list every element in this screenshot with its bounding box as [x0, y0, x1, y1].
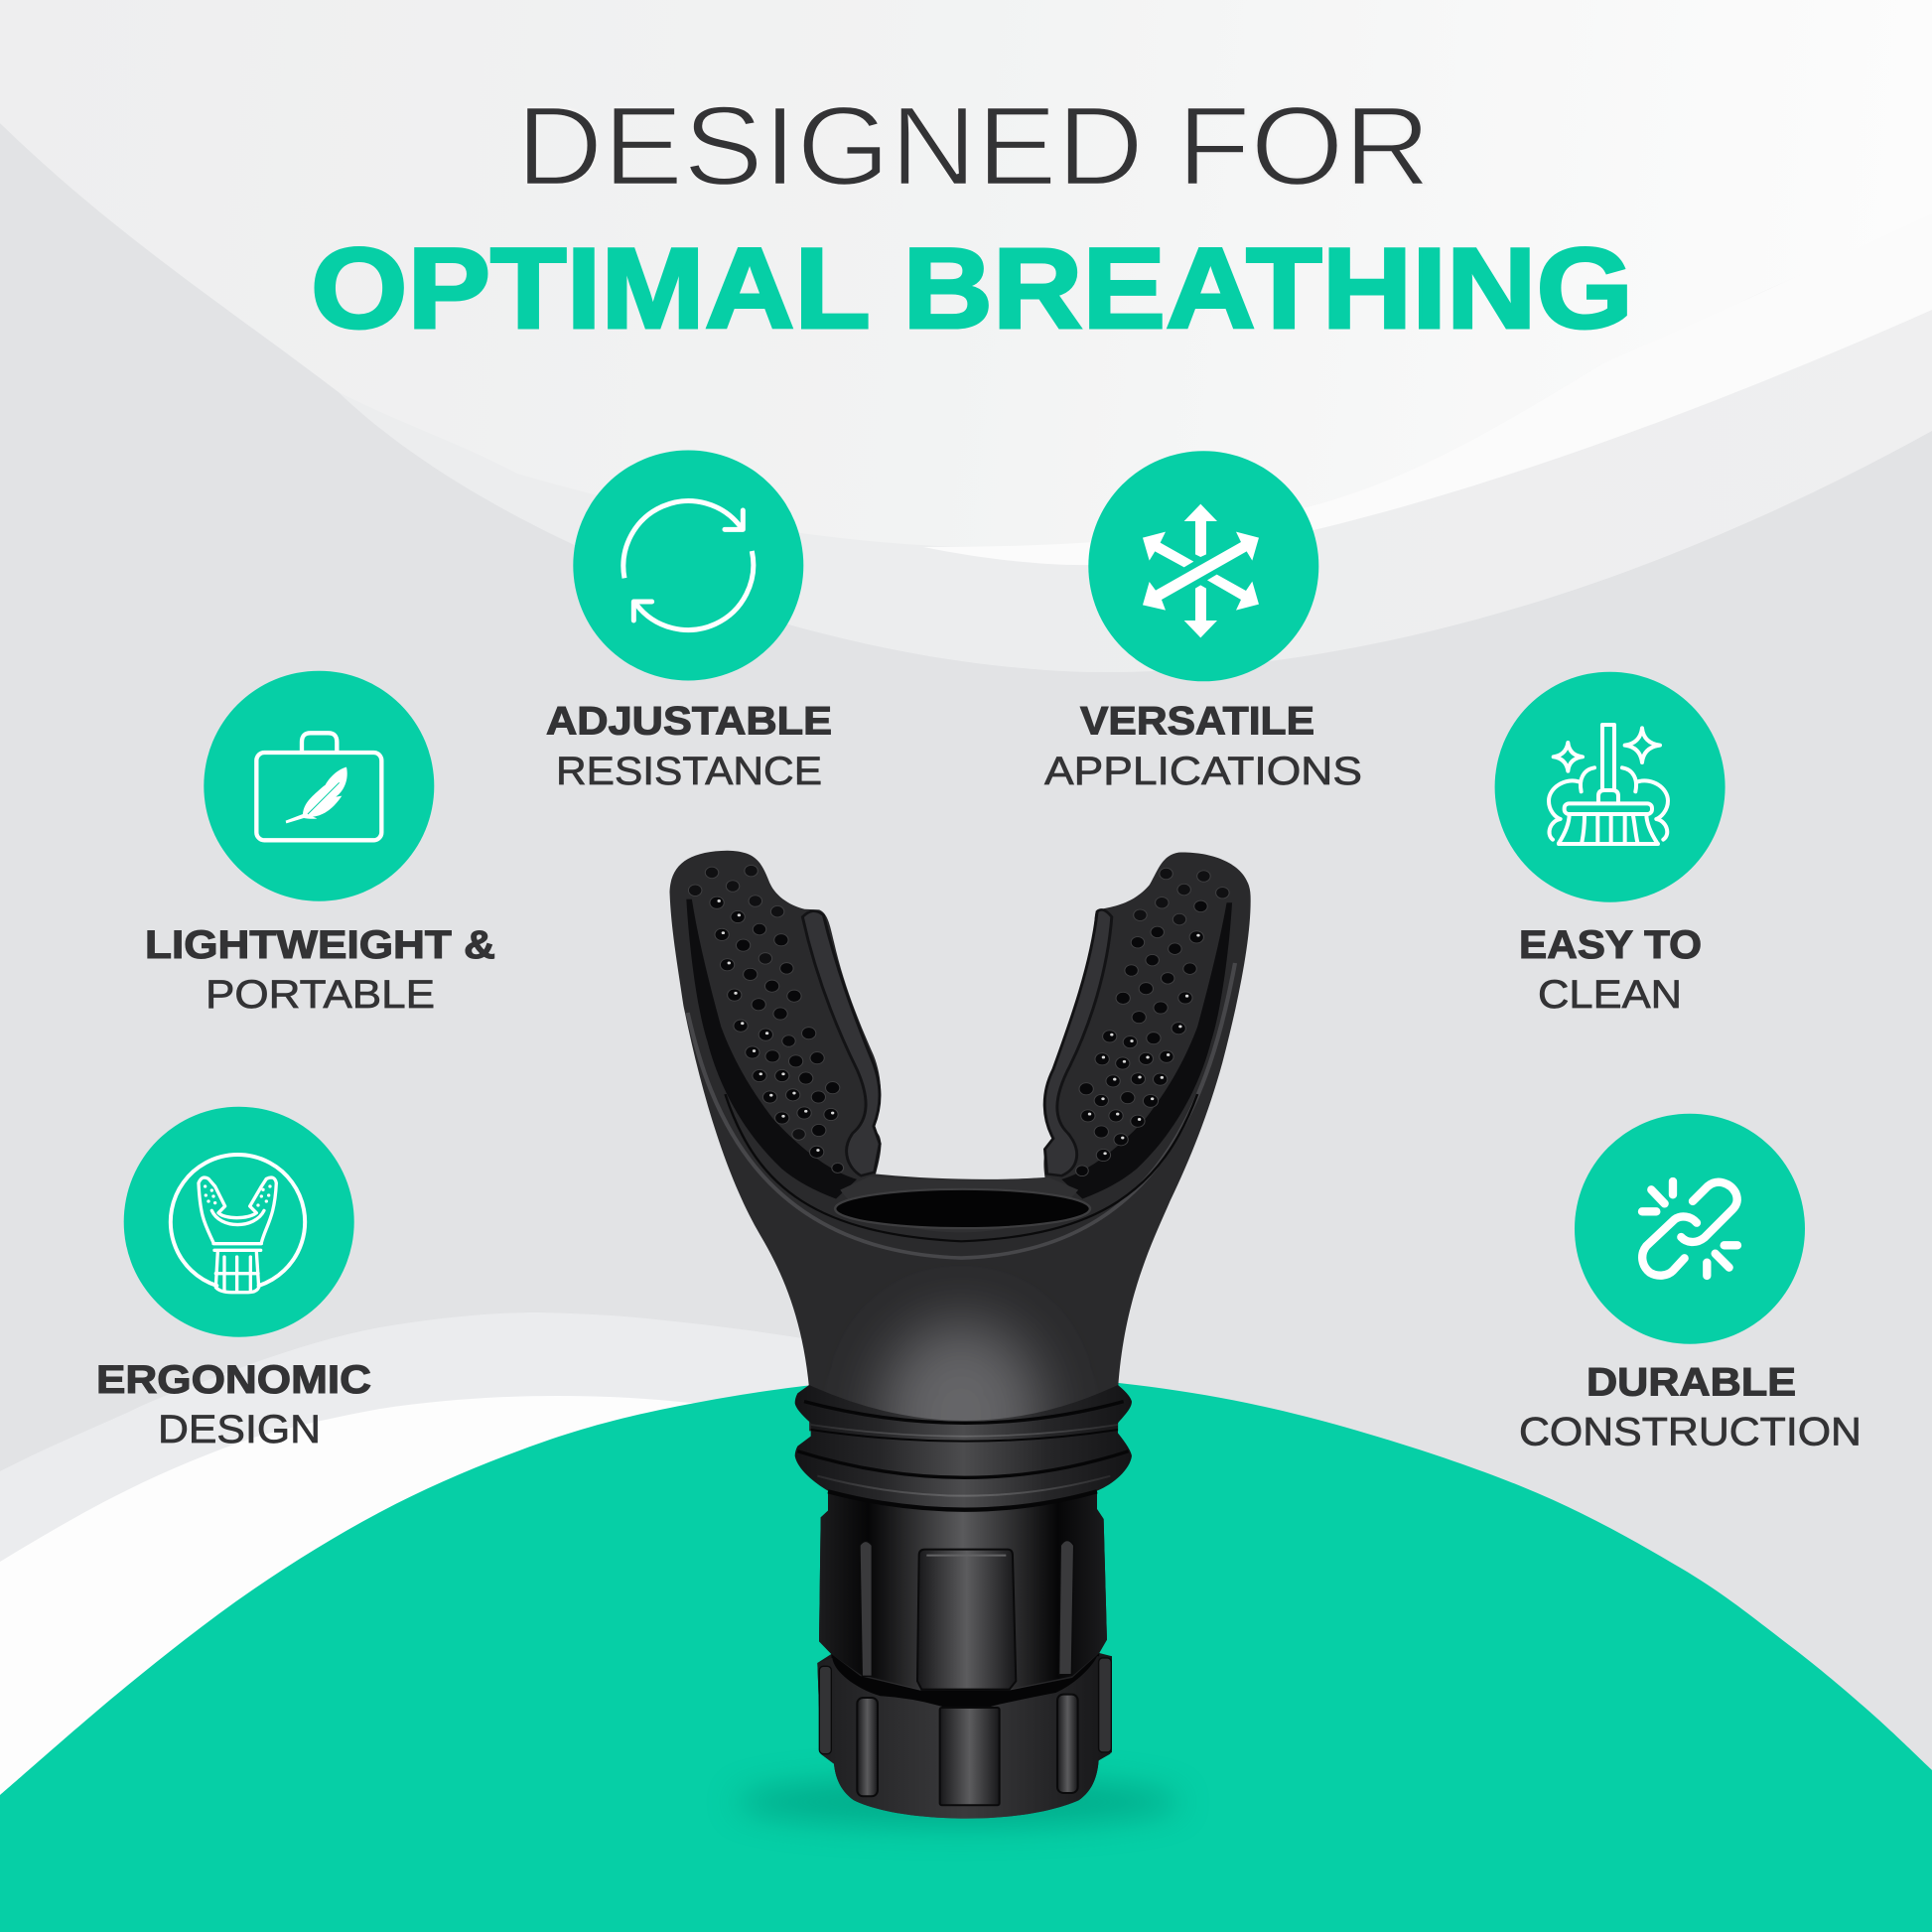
cylinder: [819, 1492, 1107, 1690]
icon: mouthpiece in circle: [124, 1107, 354, 1337]
teeth grip dots: [688, 865, 1229, 1176]
product shadow: [735, 1778, 1181, 1826]
feature: ergonomic design: [96, 1107, 371, 1451]
base cap: [817, 1656, 1112, 1819]
label: [546, 699, 832, 793]
feature: durable construction: [1519, 1114, 1862, 1453]
label: VERSATILE: [1080, 699, 1314, 743]
product mouthpiece cradle: [670, 851, 1251, 1431]
label: EASY TO: [1519, 923, 1702, 967]
cylinder ribs: [860, 1541, 872, 1676]
label: PORTABLE: [206, 973, 435, 1017]
ring grooves: [804, 1402, 1124, 1423]
title: [311, 83, 1633, 352]
label: ERGONOMIC: [96, 1358, 371, 1402]
icon: briefcase with feather: [204, 671, 434, 901]
icon: circular arrows: [573, 451, 803, 681]
label: DESIGN: [158, 1408, 321, 1451]
label: CLEAN: [1538, 973, 1682, 1017]
label: [1519, 1360, 1862, 1453]
feature: easy to clean: [1495, 672, 1725, 1017]
icon: six arrows: [1088, 451, 1318, 681]
label: APPLICATIONS: [1044, 750, 1362, 793]
dot highlights: [717, 899, 1200, 1155]
cylinder centre tab: [917, 1550, 1016, 1690]
label: DURABLE: [1587, 1360, 1796, 1404]
channel: [686, 899, 857, 1198]
title line 2: OPTIMAL BREATHING: [311, 225, 1633, 352]
feature: adjustable resistance: [546, 451, 832, 793]
label: [1519, 923, 1702, 1017]
label: [1044, 699, 1362, 793]
label: ADJUSTABLE: [546, 699, 832, 743]
product: breathing trainer mouthpiece: [670, 851, 1251, 1826]
platform and hole: [840, 1176, 1078, 1232]
title line 1: DESIGNED FOR: [516, 83, 1431, 208]
label: LIGHTWEIGHT &: [145, 923, 495, 967]
icon: broken chain link: [1575, 1114, 1805, 1344]
feature: versatile applications: [1044, 451, 1362, 793]
silhouette: [795, 1385, 1132, 1819]
label: [145, 923, 495, 1017]
product lower body: [795, 1385, 1132, 1819]
seam gap: [831, 1653, 1099, 1718]
inner flaps: [802, 911, 880, 1175]
green dome: [0, 1378, 1932, 1932]
rim ridge: [688, 963, 1235, 1258]
icon: broom with sparkles: [1495, 672, 1725, 902]
label: [96, 1358, 371, 1451]
neck highlight: [880, 1320, 1042, 1509]
label: RESISTANCE: [556, 750, 822, 793]
label: CONSTRUCTION: [1519, 1410, 1862, 1453]
feature: lightweight and portable: [145, 671, 495, 1017]
